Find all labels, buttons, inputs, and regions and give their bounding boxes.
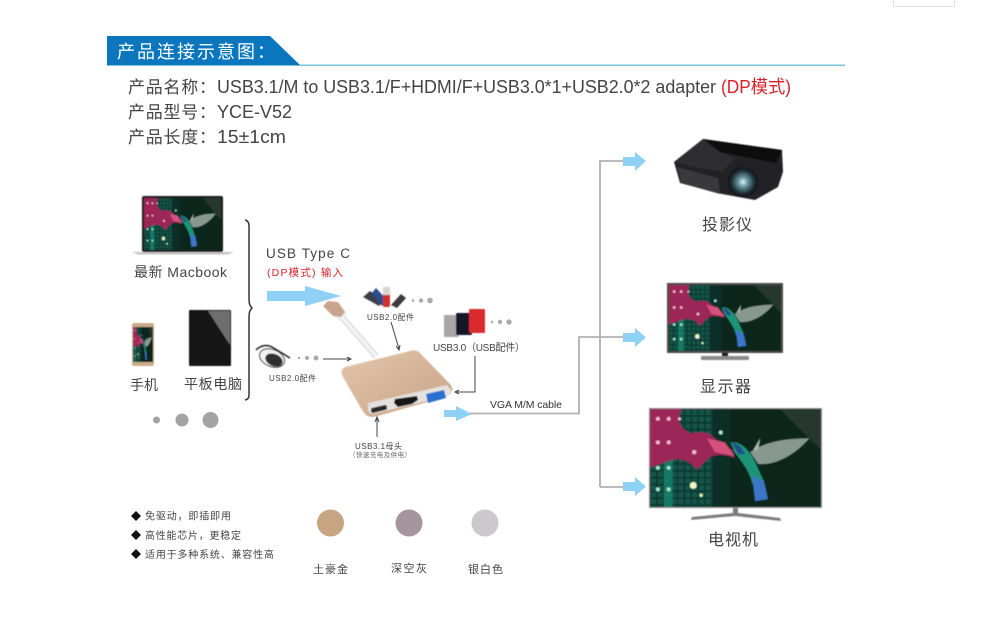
device: phone [130,323,158,393]
accessory: hard drives: USB3.0（USB配件） [433,342,525,354]
device: projector: 投影仪 [702,216,752,234]
arrow: to monitor [623,328,646,347]
arrow: output [444,406,472,421]
arrow: to tv [623,477,646,496]
product details: 产品长度： [128,128,216,147]
more dots [153,412,218,428]
feature list: 适用于多种系统、兼容性高 [145,548,274,561]
color swatch: gold: 土豪金 [313,562,348,576]
device: macbook: 最新 Macbook [134,264,228,280]
color swatch: silver: 银白色 [468,562,503,576]
usb type c input label: USB Type C [266,246,350,261]
product details: 产品名称： [128,78,216,97]
adapter port label [349,441,411,459]
arrow: to projector [623,152,646,171]
brace [245,220,252,400]
feature list [131,510,274,561]
adapter port label: USB3.1母头 [355,441,402,451]
usb type c input label: (DP模式) 输入 [267,266,344,279]
product details: USB3.1/M to USB3.1/F+HDMI/F+USB3.0*1+USB2.0*2 adapter [217,77,716,97]
device: tablet: 平板电脑 [184,376,242,392]
title banner [107,36,845,66]
arrow: input [267,286,341,306]
corner tab [894,0,954,6]
adapter port label: （快速充电及供电） [349,450,411,459]
device: phone: 手机 [130,377,158,393]
vga cable label: VGA M/M cable [490,399,562,411]
connector arrows [323,322,475,437]
device: monitor: 显示器 [700,378,751,396]
device: monitor [667,283,783,396]
device: tablet [184,310,242,392]
product details: 产品型号： [128,103,216,122]
color swatch: space gray [391,510,427,575]
device: projector [674,139,783,234]
accessory: usb drives [363,287,433,322]
color swatch: silver [468,510,503,576]
feature list: 免驱动，即插即用 [145,510,231,522]
color swatch: gold [313,510,348,576]
feature list: 高性能芯片，更稳定 [145,529,241,542]
adapter with cable [323,301,452,417]
device: tv: 电视机 [708,531,758,549]
accessory: hard drives [433,309,525,354]
device: macbook [132,196,234,280]
device: tv [649,408,822,549]
accessory: mouse: USB2.0配件 [269,373,316,383]
vga cable lines [470,161,625,487]
product details [128,77,791,147]
color swatch: space gray: 深空灰 [391,561,427,575]
accessory: mouse [256,345,318,383]
usb type c input label [266,246,350,279]
product details: (DP模式) [721,77,791,97]
product details: YCE-V52 [217,102,292,122]
title banner: 产品连接示意图： [117,42,275,62]
accessory: usb drives: USB2.0配件 [367,312,414,322]
product details: 15±1cm [217,127,286,147]
